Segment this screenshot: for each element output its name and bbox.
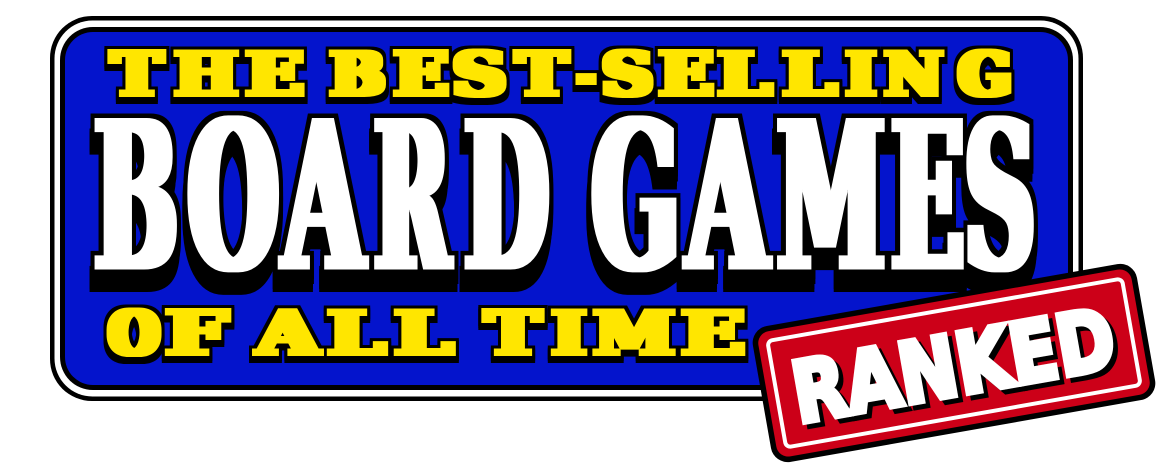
heading: of all time: L xyxy=(328,298,385,368)
badge text: ranked: RANKED xyxy=(790,295,1127,448)
panel: blue sign with double border xyxy=(50,16,1083,401)
heading: the best-selling: S xyxy=(453,39,506,109)
heading: board games: M xyxy=(778,76,884,317)
heading: board games: E xyxy=(892,76,964,317)
heading: of all time: F xyxy=(166,298,227,368)
heading: of all time: I xyxy=(552,298,586,369)
heading: the best-selling: E xyxy=(246,39,303,110)
heading: the best-selling: G xyxy=(959,40,1011,110)
heading: of all time: E xyxy=(682,297,745,368)
heading: board games: S xyxy=(965,77,1035,317)
badge: ranked xyxy=(750,261,1158,465)
heading: the best-selling: S xyxy=(602,40,653,110)
heading: board games: G xyxy=(592,77,680,318)
heading: of all time: A xyxy=(256,299,319,369)
badge text: ranked: RANKED xyxy=(785,290,1122,443)
heading: board games: O xyxy=(188,77,279,318)
heading: board games: A xyxy=(686,77,768,318)
heading: board games xyxy=(95,76,1035,318)
heading: of all time: M xyxy=(594,298,674,368)
heading: of all time: T xyxy=(486,298,540,368)
heading: the best-selling: E xyxy=(394,40,448,110)
heading: board games: R xyxy=(375,78,450,318)
heading: board games: A xyxy=(282,77,364,318)
heading: the best-selling: T xyxy=(112,40,162,110)
heading: the best-selling: L xyxy=(783,39,836,110)
heading: of all time xyxy=(109,297,745,369)
heading: the best-selling: L xyxy=(718,39,771,110)
heading: of all time: O xyxy=(109,298,159,368)
heading: the best-selling: E xyxy=(660,40,713,110)
heading: the best-selling: T xyxy=(517,40,567,110)
heading: the best-selling: I xyxy=(847,40,875,110)
heading: board games: D xyxy=(465,76,548,317)
heading: board games: B xyxy=(95,76,177,317)
heading: the best-selling xyxy=(112,38,1011,110)
heading: the best-selling: - xyxy=(578,38,594,109)
heading: of all time: L xyxy=(395,297,453,368)
heading: the best-selling: B xyxy=(331,39,385,110)
heading: the best-selling: H xyxy=(175,39,237,109)
heading: the best-selling: N xyxy=(886,40,942,110)
